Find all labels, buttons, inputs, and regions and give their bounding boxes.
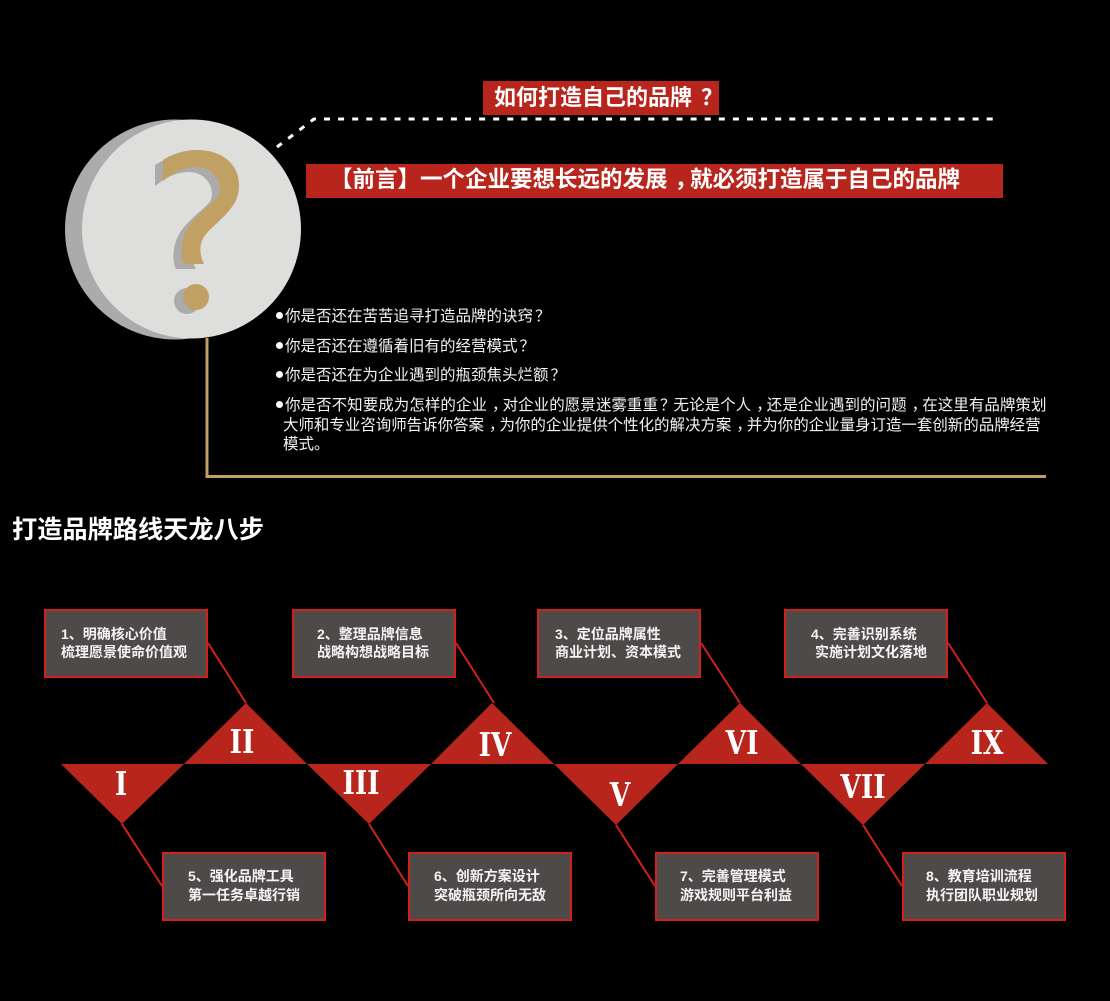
title xyxy=(483,81,719,115)
triangle I: I xyxy=(115,765,127,804)
step box 1: 梳理愿景使命价值观 xyxy=(61,644,187,660)
text block: questions: 你是否不知要成为怎样的企业 ，对企业的愿景迷雾重重？无论是个人 ，还是企业遇到的问题 ，在这里有品牌策划 xyxy=(285,397,1047,414)
step box 7: 7、完善管理模式 xyxy=(680,868,786,884)
triangle III: III xyxy=(342,764,380,803)
step box 6 xyxy=(408,852,572,921)
triangle II xyxy=(184,703,307,764)
step box 7: 游戏规则平台利益 xyxy=(680,887,792,903)
step box 5: 第一任务卓越行销 xyxy=(188,887,300,903)
triangle VII xyxy=(801,764,925,825)
triangle IV: IV xyxy=(479,726,512,765)
step box 8 xyxy=(902,852,1066,921)
step box 3: 3、定位品牌属性 xyxy=(555,626,661,642)
step box 1: 1、明确核心价值 xyxy=(61,626,167,642)
step box 5: 5、强化品牌工具 xyxy=(188,868,294,884)
triangle III xyxy=(307,764,431,824)
text block: questions: 你是否还在遵循着旧有的经营模式？ xyxy=(285,338,535,355)
step box 1 xyxy=(44,609,208,678)
step box 3: 商业计划、资本模式 xyxy=(555,644,681,660)
heading: eight steps: 打造品牌路线天龙八步 xyxy=(12,516,264,544)
step box 7 xyxy=(655,852,819,921)
step box 2: 2、整理品牌信息 xyxy=(317,626,423,642)
triangle VI: VI xyxy=(725,724,758,763)
step box 4: 4、完善识别系统 xyxy=(811,626,917,642)
text block: questions: 模式。 xyxy=(283,436,330,453)
banner: preface: 【前言】一个企业要想长远的发展 ，就必须打造属于自己的品牌 xyxy=(330,167,960,192)
triangle II: II xyxy=(230,723,254,762)
text block: questions: 你是否还在为企业遇到的瓶颈焦头烂额？ xyxy=(285,367,566,384)
step box 4 xyxy=(784,609,948,678)
step box 4: 实施计划文化落地 xyxy=(815,644,927,660)
gold bracket line xyxy=(206,338,1046,478)
text block: questions xyxy=(276,308,1047,453)
triangle IX xyxy=(925,703,1048,764)
triangle VII: VII xyxy=(840,768,886,807)
text block: questions: 你是否还在苦苦追寻打造品牌的诀窍？ xyxy=(285,308,551,325)
step box 2 xyxy=(292,609,456,678)
step box 2: 战略构想战略目标 xyxy=(317,644,429,660)
step box 6: 突破瓶颈所向无敌 xyxy=(434,887,546,903)
step box 6: 6、创新方案设计 xyxy=(434,868,540,884)
triangle V xyxy=(554,764,678,825)
text block: questions: 大师和专业咨询师告诉你答案 ，为你的企业提供个性化的解决方案 ，并为你的企业量身订造一套创新的品牌经营 xyxy=(283,417,1041,434)
step box 5 xyxy=(162,852,326,921)
step box 3 xyxy=(537,609,701,678)
triangle IV xyxy=(431,703,554,765)
triangle VI xyxy=(678,703,801,764)
step box 8: 8、教育培训流程 xyxy=(926,868,1032,884)
dashed connector line xyxy=(276,118,993,148)
icon: question mark circle xyxy=(65,120,301,340)
triangle I xyxy=(61,764,184,824)
banner: preface xyxy=(306,164,1003,198)
step box 8: 执行团队职业规划 xyxy=(926,887,1038,903)
triangle V: V xyxy=(609,776,631,815)
triangle IX: IX xyxy=(971,724,1004,763)
title: 如何打造自己的品牌 ？ xyxy=(494,85,723,110)
